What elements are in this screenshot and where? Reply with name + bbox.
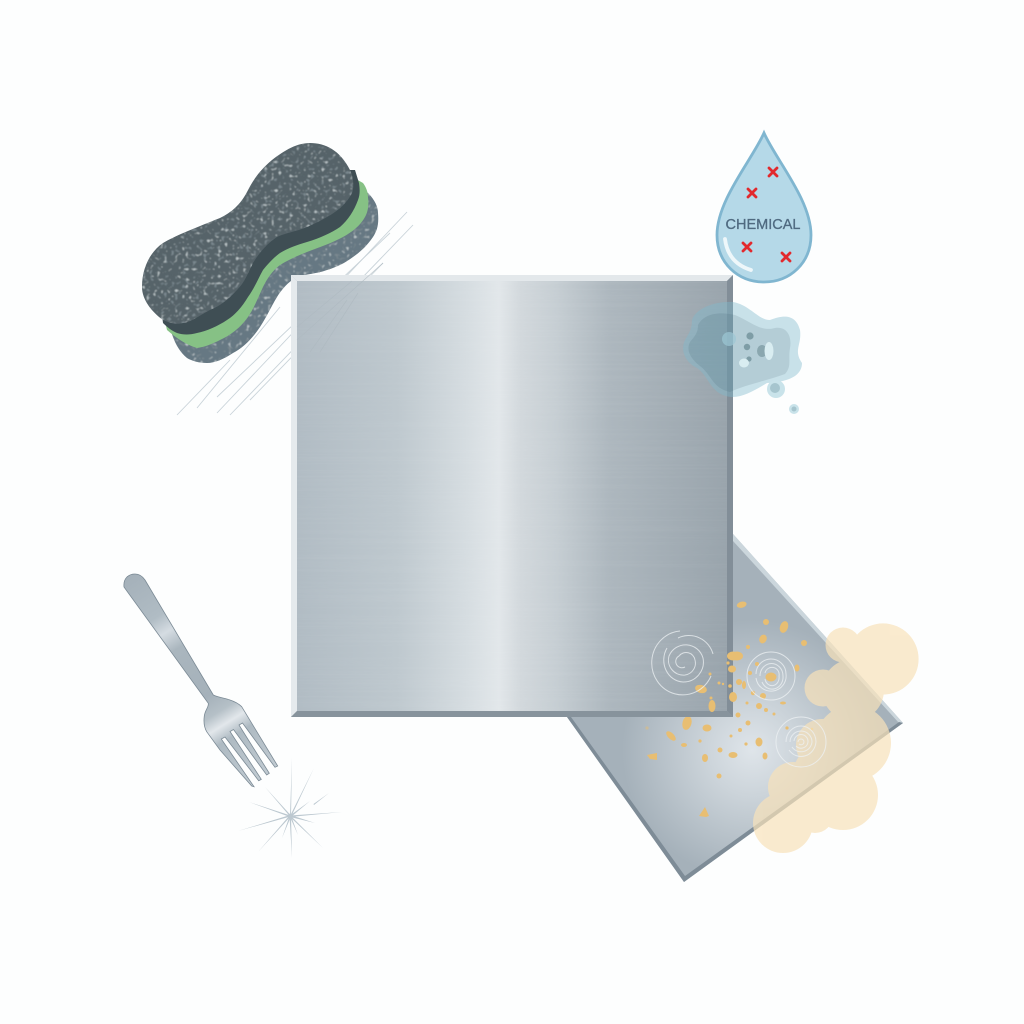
back plate dark edge [567, 717, 903, 882]
flecks over plate [694, 652, 739, 712]
swirl right [776, 717, 826, 767]
gold flecks [645, 601, 813, 817]
dust cloud [753, 623, 919, 853]
drop highlight [725, 239, 751, 270]
swirl marks [652, 631, 826, 767]
swirl left [652, 631, 713, 695]
sponge bottom layer [160, 170, 378, 363]
red contaminant marks [743, 168, 790, 261]
back plate face [567, 534, 903, 882]
sponge green layer [160, 170, 368, 348]
main plate face [291, 275, 733, 717]
scratch lines [177, 212, 413, 415]
main plate [291, 275, 733, 717]
brushed texture [297, 281, 727, 711]
scratch lines over plate [297, 263, 383, 352]
plate top bevel [291, 275, 733, 281]
sponge top face [142, 143, 353, 324]
drop label: CHEMICAL [726, 217, 800, 233]
stain bubbles [722, 332, 774, 368]
stain outer [683, 302, 802, 397]
plate right bevel [727, 275, 733, 717]
icon: sparkle [238, 757, 342, 858]
sponge dark edge [160, 170, 360, 334]
swirl middle [747, 652, 795, 700]
plate bottom bevel [291, 711, 733, 717]
icon: chemical drop [717, 133, 811, 282]
stain inner [688, 313, 790, 392]
icon: fork [124, 574, 278, 787]
icon: sponge [142, 143, 378, 363]
stain droplet large [767, 380, 785, 398]
back plate light edge [733, 534, 903, 723]
drop body [717, 133, 811, 282]
plate left bevel [291, 275, 297, 717]
stain droplet small [789, 404, 799, 414]
back plate [567, 534, 903, 882]
icon: chemical stain [683, 302, 802, 414]
